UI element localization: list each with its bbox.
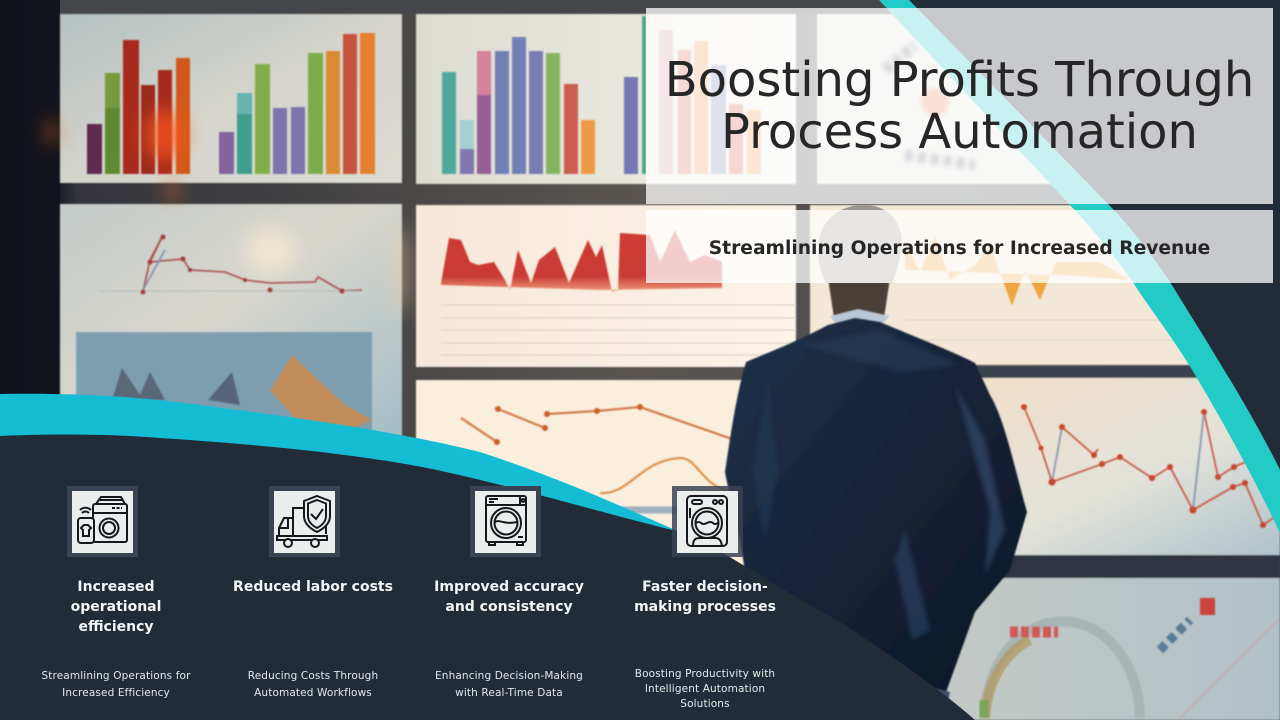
benefit heading: efficiency: efficiency <box>78 619 154 635</box>
benefit description: decision-making: Solutions <box>680 698 730 710</box>
line chart: left panel <box>100 234 362 294</box>
benefit description: decision-making: Boosting Productivity with <box>635 668 775 680</box>
icon: truck with shield <box>269 486 340 557</box>
benefit description: efficiency <box>41 670 191 699</box>
benefit description: efficiency: Streamlining Operations for <box>41 670 191 682</box>
benefit description: decision-making: Intelligent Automation <box>645 683 765 695</box>
benefit description: accuracy: Enhancing Decision-Making <box>435 670 583 682</box>
benefit heading: accuracy <box>434 579 584 615</box>
icon: smart washer and phone <box>67 486 138 557</box>
area chart: red revenue <box>441 230 1180 355</box>
benefit heading: decision-making <box>634 579 776 615</box>
benefit heading: decision-making: making processes <box>634 599 776 615</box>
subtitle: Streamlining Operations for Increased Revenue <box>709 238 1210 259</box>
benefit description: efficiency: Increased Efficiency <box>62 687 170 699</box>
benefit description: accuracy <box>435 670 583 699</box>
line chart: orange trend <box>461 404 740 510</box>
faint icons in top-right panel <box>885 45 975 165</box>
benefit description: labor costs: Automated Workflows <box>254 687 372 699</box>
benefit description: labor costs <box>248 670 378 699</box>
line chart: red right panel <box>1021 404 1280 528</box>
benefit heading: efficiency: operational <box>71 599 161 615</box>
icon: front-load washer <box>470 486 541 557</box>
bar charts <box>87 16 761 174</box>
benefit description: labor costs: Reducing Costs Through <box>248 670 378 682</box>
title: Boosting Profits Through <box>665 52 1254 108</box>
right corner dark shape with teal band <box>879 0 1280 533</box>
title: Process Automation <box>721 104 1198 160</box>
benefit heading: decision-making: Faster decision- <box>642 579 768 595</box>
benefit heading: accuracy: Improved accuracy <box>434 579 584 595</box>
benefit heading: efficiency: Increased <box>77 579 155 595</box>
triangle chart: left panel <box>112 355 372 430</box>
benefit heading: labor costs: Reduced labor costs <box>233 579 393 595</box>
subtitle banner <box>646 210 1273 283</box>
title <box>665 52 1254 160</box>
bottom-left dark wave with teal band <box>0 394 975 720</box>
benefit heading: efficiency <box>71 579 161 635</box>
icon: top-control washer <box>672 486 743 557</box>
title banner <box>646 8 1273 204</box>
radial chart: bottom right <box>984 598 1278 718</box>
lens flare glows <box>45 109 410 315</box>
benefit heading: accuracy: and consistency <box>445 599 573 615</box>
businessman seen from behind <box>725 205 1027 716</box>
benefit description: decision-making <box>635 668 775 710</box>
benefit description: accuracy: with Real-Time Data <box>455 687 563 699</box>
